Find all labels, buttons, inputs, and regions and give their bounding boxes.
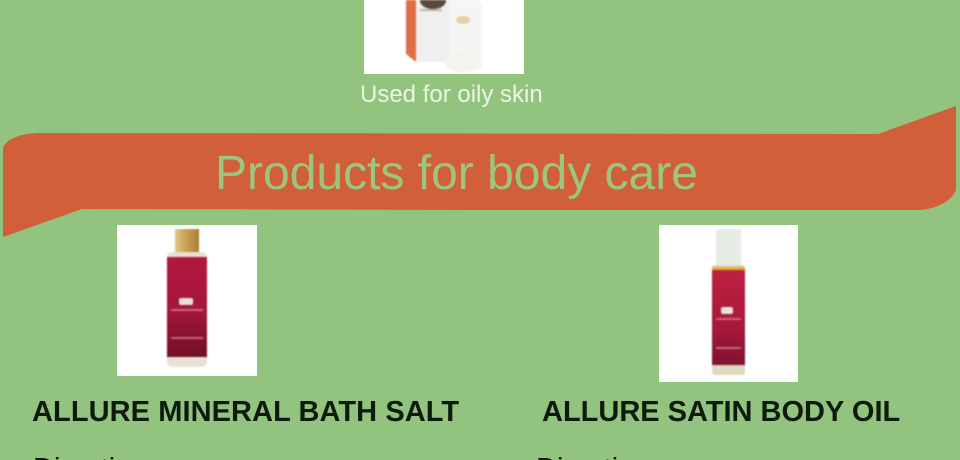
ribbon banner	[3, 106, 956, 237]
product photo: body oil bottle	[659, 225, 798, 382]
banner heading: Products for body care	[215, 147, 698, 200]
product name: body oil: ALLURE SATIN BODY OIL	[542, 396, 900, 428]
product name: bath salt: ALLURE MINERAL BATH SALT	[32, 396, 459, 428]
caption: used for oily skin: Used for oily skin	[360, 81, 543, 108]
product photo: oily skin product box and bottle	[364, 0, 524, 74]
product photo: bath salt bottle	[117, 225, 257, 376]
